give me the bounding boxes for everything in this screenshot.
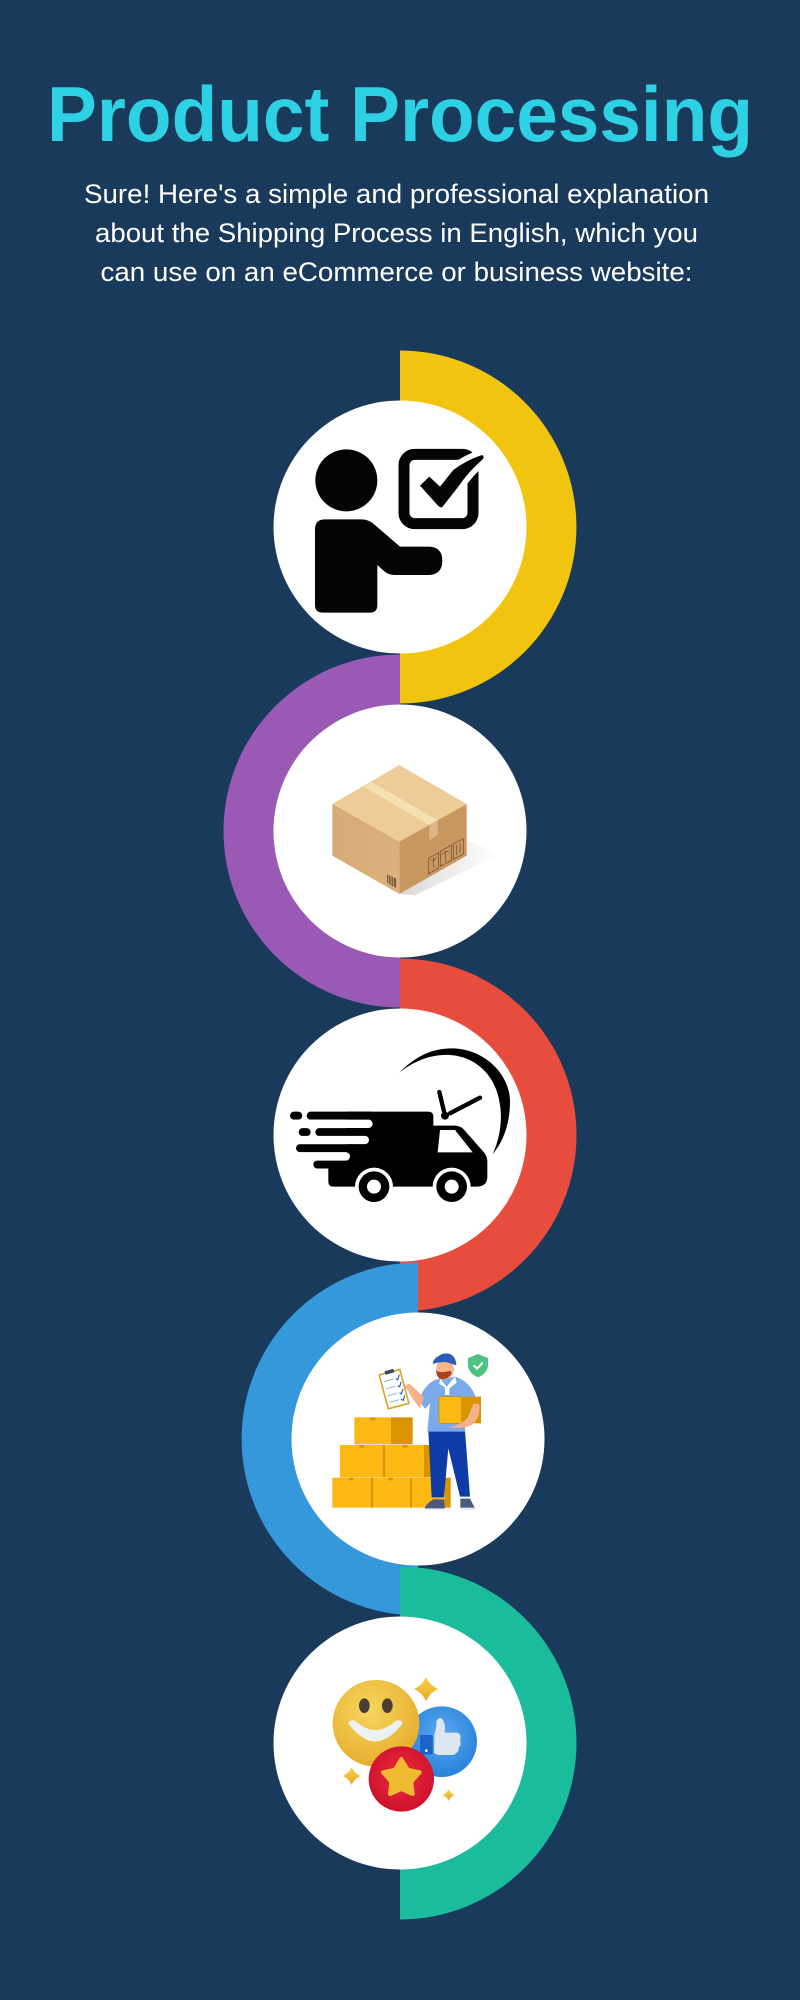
worker shirt	[419, 1377, 477, 1432]
subtitle text block: about the Shipping Process in English, which you	[95, 218, 698, 248]
subtitle text block	[84, 179, 709, 287]
step 1 white circle	[274, 400, 526, 654]
smiley	[333, 1680, 419, 1767]
step 2 white circle	[274, 704, 526, 958]
icon: delivery van with clock	[290, 1048, 510, 1206]
step 5 white circle	[274, 1616, 526, 1870]
step 4 half ring: blue	[242, 1262, 418, 1616]
step 2 half ring: purple	[224, 654, 400, 1008]
icon: customer satisfaction emojis	[333, 1677, 477, 1812]
icon: person with checkbox	[315, 449, 484, 613]
subtitle text block: Sure! Here's a simple and professional explanation	[84, 179, 709, 209]
step 3 white circle	[274, 1008, 526, 1262]
step 5 half ring: teal	[400, 1566, 576, 1920]
sparkles	[414, 1677, 438, 1701]
icon: delivery worker with boxes	[332, 1353, 488, 1510]
held box	[462, 1397, 481, 1423]
step 4 white circle	[292, 1312, 544, 1566]
worker legs	[428, 1431, 470, 1497]
worker head	[436, 1359, 454, 1379]
icon: cardboard box	[332, 765, 500, 895]
star badge	[369, 1746, 434, 1812]
like badge	[406, 1706, 477, 1777]
subtitle text block: can use on an eCommerce or business website:	[100, 257, 692, 287]
shield	[468, 1354, 488, 1377]
title: Product Processing	[47, 70, 753, 158]
step 3 half ring: red	[400, 958, 576, 1312]
step 1 half ring: yellow	[400, 350, 576, 704]
clipboard	[379, 1367, 409, 1409]
